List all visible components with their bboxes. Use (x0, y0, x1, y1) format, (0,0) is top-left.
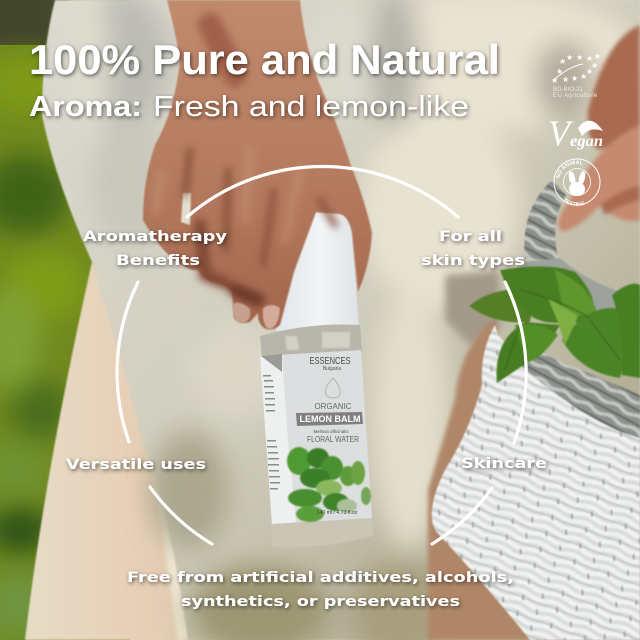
bottle collar (260, 324, 362, 358)
nail: middle finger (233, 303, 250, 323)
basket back rim (525, 258, 640, 345)
hand silhouette (143, 0, 372, 329)
badge: no animal testing: TESTING (564, 198, 584, 206)
basket handle (524, 180, 566, 264)
finger gap (181, 193, 191, 225)
label text: ORGANIC (314, 401, 352, 411)
cream skirt (25, 262, 205, 640)
badge: no animal testing: NO ANIMAL (556, 160, 582, 178)
badge: EU organic: ★ (580, 72, 587, 81)
badge: EU organic: ★ (566, 53, 573, 62)
label: aromatherapy benefits (83, 229, 228, 269)
badge: no animal testing (554, 158, 600, 206)
hand shading (156, 25, 335, 300)
badge: EU organic: ★ (576, 53, 583, 62)
label mint leaves (287, 447, 371, 522)
badge: EU organic: ★ (559, 57, 566, 66)
label side text (263, 375, 280, 490)
label: free from: Free from artificial additives, alcohols, (127, 570, 514, 586)
label: versatile uses: Versatile uses (66, 457, 206, 473)
label: aromatherapy benefits: Aromatherapy (83, 229, 228, 245)
label text: ESSENCES (310, 355, 350, 367)
badge: EU organic: ★ (556, 67, 563, 76)
badge: vegan (548, 113, 603, 153)
subtitle (29, 91, 469, 123)
main hand (143, 0, 372, 329)
badge: EU organic: ★ (586, 67, 593, 76)
product bottle (260, 213, 373, 548)
basket (428, 180, 640, 640)
badge: EU organic: ★ (586, 54, 593, 63)
bottle base (268, 495, 373, 548)
right hand holding basket (558, 25, 640, 232)
bottle cap (276, 213, 359, 331)
product bottle: Melissa officinalis (314, 429, 349, 434)
label band (296, 412, 363, 426)
label: for all skin types (421, 229, 525, 269)
badge: EU organic: EU Agriculture (553, 93, 598, 99)
badge: EU organic: ★ (551, 76, 558, 85)
basket backdrop shadow (445, 270, 500, 345)
garden background (0, 0, 130, 640)
product bottle: LEMON BALM (300, 414, 361, 425)
badge: EU organic: ★ (571, 74, 578, 83)
label: aromatherapy benefits: Benefits (116, 253, 200, 269)
badge: EU organic: ★ (594, 52, 601, 61)
label: free from: synthetics, or preservatives (181, 594, 460, 610)
bottle label (260, 350, 372, 524)
label drop (325, 378, 340, 398)
subtitle: Aroma: (29, 91, 142, 123)
label: for all skin types: skin types (421, 253, 525, 269)
title: 100% Pure and Natural (29, 36, 500, 83)
subtitle: Fresh and lemon-like (153, 91, 469, 123)
mint sprig (469, 266, 640, 383)
label text (310, 355, 352, 411)
badge: EU organic: BG-BIO-21 (553, 87, 583, 93)
circular arcs (117, 166, 526, 544)
badge: EU organic (551, 52, 601, 99)
product bottle: 140 ml / 4.73 fl.oz (317, 510, 358, 516)
label: for all skin types: For all (439, 229, 502, 245)
label: skincare: Skincare (461, 456, 547, 472)
nail: index finger (263, 305, 280, 329)
badge: EU organic: ★ (591, 61, 598, 70)
badge: vegan: egan (570, 133, 603, 150)
badge: EU organic: ★ (562, 75, 569, 84)
basket body (432, 325, 640, 640)
label: free from (127, 570, 514, 610)
label text: Bulgaria (323, 366, 341, 372)
badge: vegan: V (548, 113, 574, 153)
basket inner rim (520, 350, 640, 438)
product bottle: FLORAL WATER (307, 434, 359, 444)
